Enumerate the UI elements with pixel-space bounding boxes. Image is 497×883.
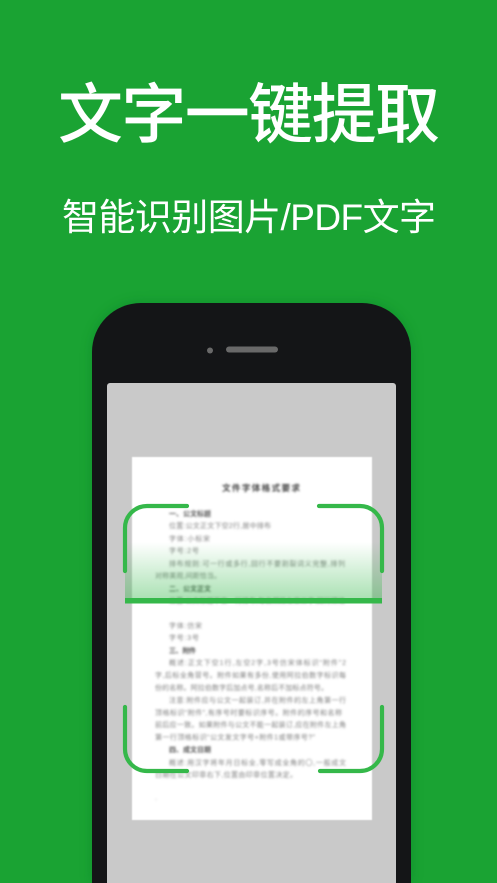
document text: 位置:公文正文下空2行,居中排布 xyxy=(169,521,271,530)
document text: 一、公文标题 xyxy=(169,509,211,518)
phone mockup xyxy=(92,303,411,883)
bracket: top right xyxy=(319,506,382,571)
bracket: top left xyxy=(125,506,187,571)
screen xyxy=(107,383,396,883)
document text: 二、公文正文 xyxy=(169,584,211,593)
document text: 日期在公文印章右下,位置由印章位置决定。 xyxy=(155,770,297,779)
document text xyxy=(155,482,346,802)
bracket: bottom right xyxy=(320,707,382,771)
document text: 文件字体格式要求 xyxy=(222,482,300,493)
document text: 字,后标全角冒号。附件如果有多份,使用阿拉伯数字标识每 xyxy=(155,670,346,680)
camera dot xyxy=(207,348,213,354)
title: 文字一键提取 xyxy=(58,78,440,151)
document page xyxy=(132,457,372,820)
bracket: bottom left xyxy=(125,707,187,771)
document text: 第一行顶格标识“公文发文字号+附件1或带序号?” xyxy=(155,732,316,742)
document text: 对称美观,间距恰当。 xyxy=(155,571,221,580)
document text: 字体:仿宋 xyxy=(169,621,202,630)
document text: 字号:2号 xyxy=(169,546,199,555)
document text: 概述:用汉字将年月日标全,零写成全角的〇,一般成文 xyxy=(169,758,346,767)
subtitle: 智能识别图片/PDF文字 xyxy=(62,197,436,238)
scan gradient xyxy=(125,542,382,599)
document text: 排布规则:可一行或多行,回行不要割裂词义完整,排列 xyxy=(169,559,345,568)
document text: 三、附件 xyxy=(169,646,196,655)
document text: 注意:附件应与公文一起装订,并在附件的左上角第一行 xyxy=(169,696,346,704)
document text: 字号:3号 xyxy=(169,633,199,642)
document text: 概述:正文下空1行,左空2字,3号仿宋体标识“附件”2 xyxy=(169,658,346,667)
document text: 前后应一致。如果附件与公文不能一起装订,应在附件左上角 xyxy=(155,720,346,729)
document text: 四、成文日期 xyxy=(169,745,211,754)
document text: 顶格标识“附件”,有序号时要标识序号。附件的序号和名称 xyxy=(155,708,342,717)
document text: 位置:公文标题下空一行排布,每自然段左空二字,回行顶格 xyxy=(169,596,345,605)
scanner xyxy=(125,506,382,771)
paper xyxy=(132,457,372,820)
phone body xyxy=(92,303,411,883)
scan line xyxy=(125,598,382,604)
document text: . xyxy=(155,795,157,802)
phone shadow xyxy=(92,303,411,883)
document text: 份的名称。阿拉伯数字后加点号,名称后不加标点符号。 xyxy=(155,683,328,692)
speaker xyxy=(226,346,278,352)
document text: 字体:小标宋 xyxy=(169,534,210,543)
